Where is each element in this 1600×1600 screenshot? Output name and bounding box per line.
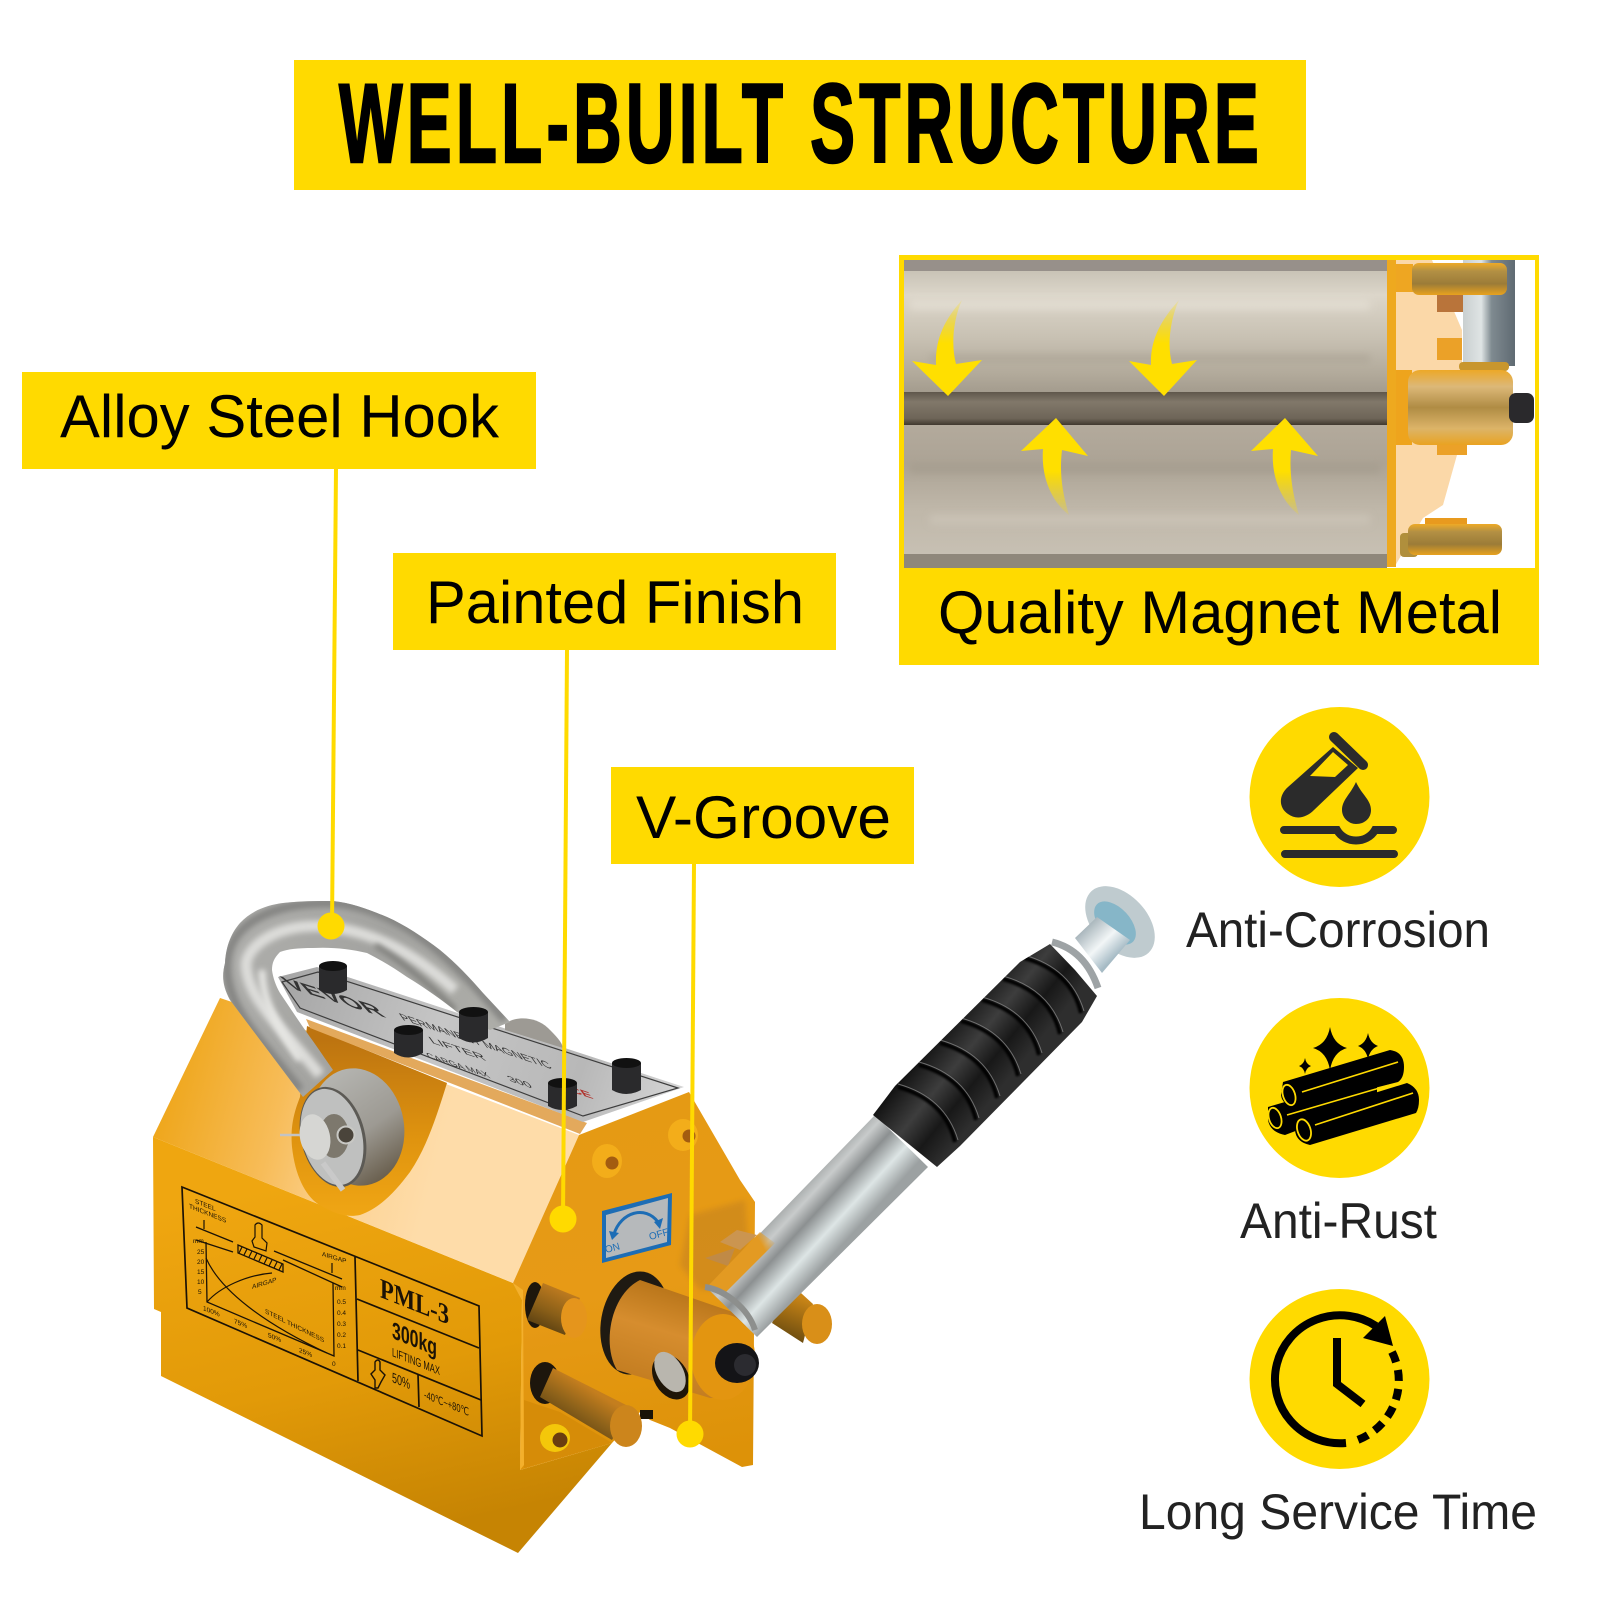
magnetic lifter product illustration [153,873,1168,1553]
handle: steel tube [705,1115,928,1337]
plate text: PERMANENT MAGNETIC [397,1011,555,1072]
magnet end plate and hardware [1387,260,1534,567]
title banner [294,60,1306,190]
specification label text: LIFTING MAX [392,1345,440,1378]
specification label frame and chart [182,1187,482,1436]
yellow arrows: magnetic force [912,300,1318,515]
top metal plate [276,967,684,1134]
specification label text: AIRGAP [252,1277,277,1291]
rear rod [772,1283,832,1344]
upper locking pin [525,1282,587,1338]
feature: long service time: Long Service Time [1139,1484,1537,1540]
socket bolts on plate [319,961,641,1110]
icon: clock with arrow [1275,1315,1399,1443]
specification label text: 10 [197,1279,205,1286]
specification label text: mm [335,1285,346,1292]
plate text: LIFTER [426,1035,489,1064]
specification label text: 0.3 [337,1321,346,1328]
specification label text: 75% [234,1318,247,1330]
specification label text [189,1198,469,1419]
hole in top face [292,1026,447,1216]
callout: alloy steel hook: Alloy Steel Hook [60,383,500,450]
on/off sticker: ON [604,1241,621,1256]
panel: quality magnet metal [899,255,1539,665]
bolts on end plate [540,1119,698,1452]
feature: long service time [1139,1289,1537,1540]
specification label text: 0.4 [337,1310,346,1317]
end plate [513,1092,755,1470]
specification label text: AIRGAP [322,1251,347,1265]
body: sloped top face [153,998,579,1283]
handle: black rubber grip [873,944,1097,1167]
lower end block [524,1400,612,1468]
on/off sticker: OFF [648,1227,670,1243]
callout: painted finish [393,553,836,1232]
specification label text: 25 [197,1249,205,1256]
shadow and tan patches behind handle [680,1200,757,1290]
feature: anti-rust [1240,998,1437,1249]
plate text: CE [566,1084,596,1102]
handle: steel knob [1052,873,1168,988]
shackle eye and pin [280,1061,414,1194]
specification label text: mm [193,1238,204,1245]
caption: Quality Magnet Metal [938,579,1502,646]
specification label text: 300kg [392,1317,437,1362]
specification label text: PML-3 [380,1273,449,1331]
specification label text: 5 [198,1289,202,1296]
specification label text: THICKNESS [189,1203,227,1225]
callout: v-groove: V-Groove [636,784,891,851]
plate text: CARGA MAX [423,1050,493,1081]
specification label text: 20 [197,1259,205,1266]
feature: anti-corrosion [1186,707,1490,958]
callout: painted finish: Painted Finish [426,569,804,636]
plate text: VEVOR [276,973,391,1022]
on/off sticker [602,1193,672,1263]
feature: anti-corrosion: Anti-Corrosion [1186,902,1490,958]
specification label text: 50% [268,1332,281,1344]
plate text: 300 [504,1073,535,1091]
specification label text: STEEL THICKNESS [265,1308,324,1345]
specification label text: STEEL [195,1198,216,1213]
icon: steel pipes and sparkles [1266,1027,1419,1145]
specification label text: 0.2 [337,1332,346,1339]
specification label text: 0 [332,1361,336,1368]
alloy steel shackle [223,901,510,1097]
specification label text: 50% [392,1370,410,1393]
lower locking pin [530,1362,653,1447]
specification label text: 0.1 [337,1343,346,1350]
central shaft [592,1266,747,1406]
magnet metal cylinders photo [904,260,1387,568]
feature: anti-rust: Anti-Rust [1240,1193,1437,1249]
callout: v-groove [611,767,914,1448]
end plate left edge highlight [513,1283,524,1470]
body: front face [153,1137,612,1553]
specification label text: 0.5 [337,1299,346,1306]
handle: end cap and bolt [691,1314,759,1400]
callout: alloy steel hook [22,372,536,940]
specification label text: 15 [197,1269,205,1276]
icon: test tube and drop [1281,737,1394,854]
specification label text: 100% [203,1305,220,1319]
specification label text: -40℃~+80℃ [424,1389,469,1419]
specification label text: 25% [299,1347,312,1359]
plate text [276,973,596,1102]
shackle rear lug [505,1018,563,1048]
